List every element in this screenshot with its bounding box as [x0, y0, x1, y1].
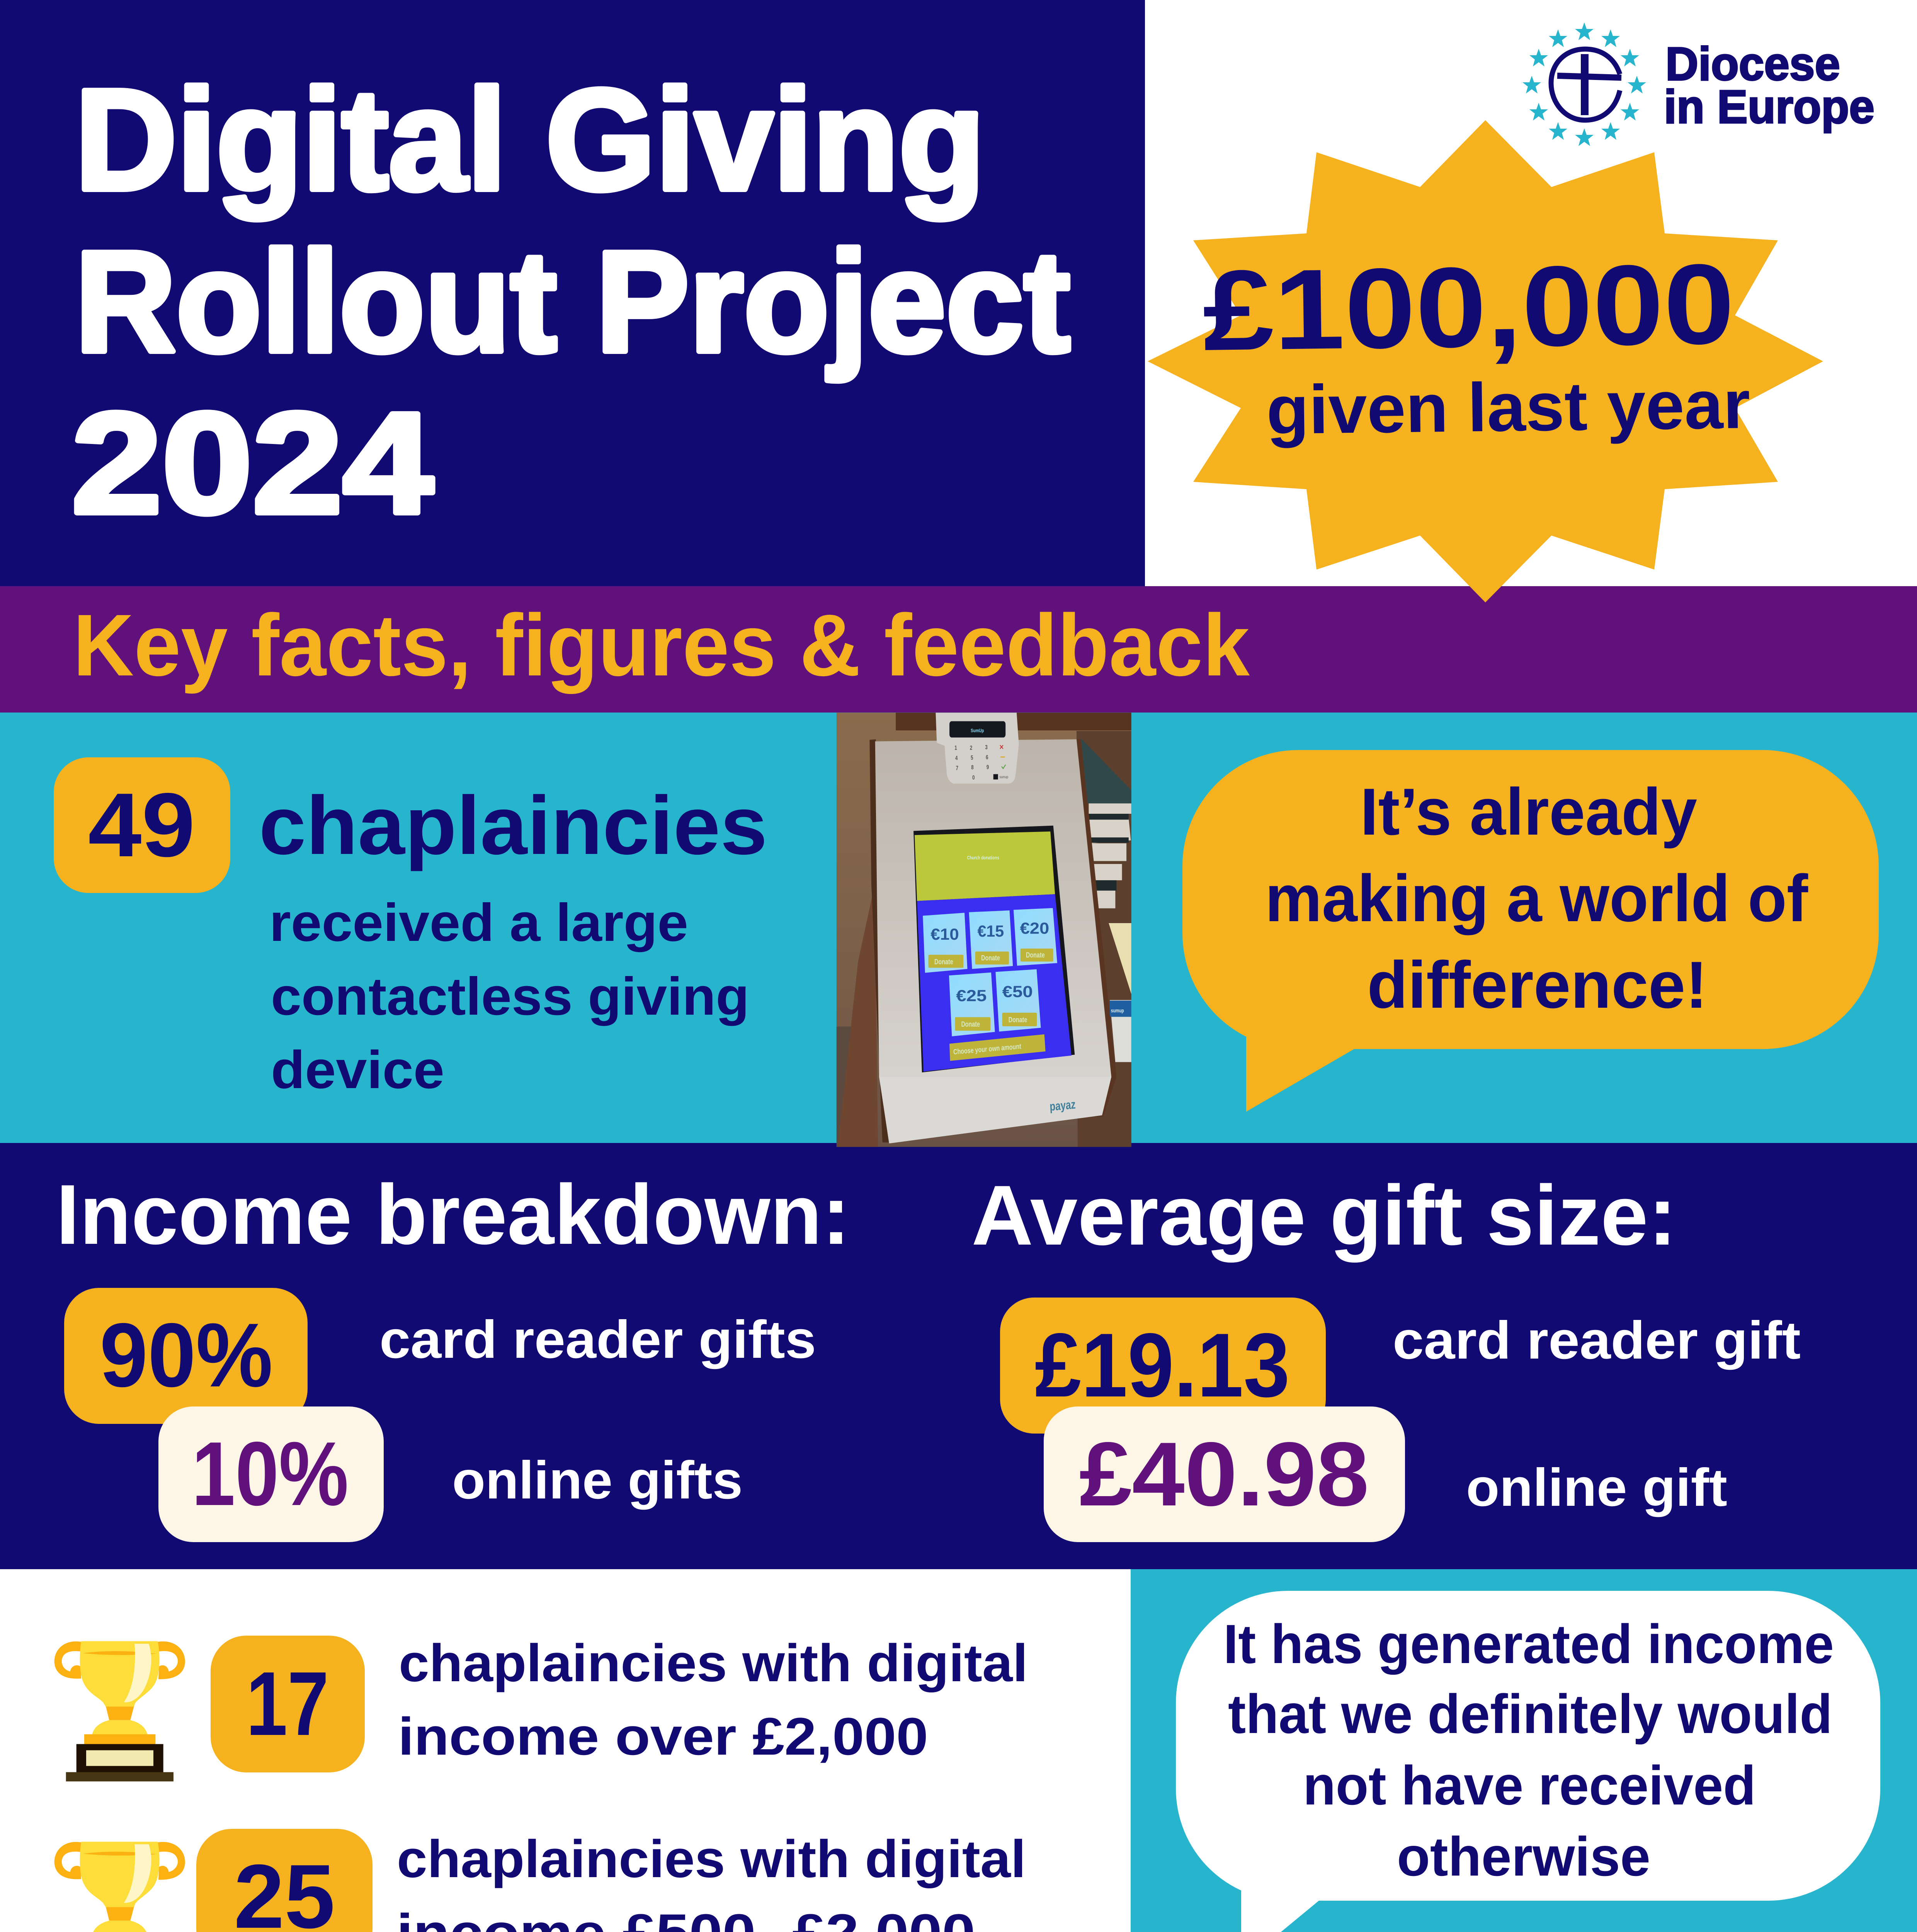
screen: €25 [956, 987, 987, 1005]
speech bubble: world of difference: It’s already [1360, 775, 1697, 849]
text: income 500 to 2,000 [396, 1830, 1026, 1932]
screen: Donate [934, 957, 953, 966]
heading: income breakdown: Income breakdown: [56, 1167, 850, 1262]
screen: Church donations [967, 855, 999, 861]
logo text: in Europe [1664, 80, 1874, 133]
heading: Digital Giving Rollout Project 2024: Rollout Project [75, 221, 1070, 383]
screen: €50 [1002, 983, 1033, 1000]
card reader: 1 [954, 745, 957, 751]
heading: Digital Giving Rollout Project 2024 [71, 59, 1070, 543]
screen: Donate [961, 1020, 980, 1028]
stat: 17 chaplaincies [211, 1636, 365, 1772]
text: income over 2,000 [398, 1634, 1028, 1766]
text: chaplaincies received device: contactless giving [271, 967, 749, 1026]
text: income over 2,000: income over £2,000 [398, 1707, 928, 1766]
stat: 90 percent card reader gifts [64, 1288, 816, 1424]
heading: Digital Giving Rollout Project 2024: Digital Giving [75, 59, 985, 221]
stat: 25 chaplaincies [196, 1829, 373, 1932]
stat: 10 percent online gifts [158, 1406, 743, 1542]
logo: Diocese in Europe [1522, 22, 1874, 146]
speech bubble: world of difference: difference! [1367, 948, 1708, 1022]
speech bubble: world of difference [1182, 750, 1879, 1112]
stat: 90 percent card reader gifts: 90% [100, 1304, 273, 1406]
panel: chaplaincy income tiers [0, 1569, 1131, 1932]
callout: 100,000 starburst: £100,000 [1202, 240, 1735, 374]
card reader: 3 [985, 744, 988, 751]
stat: average card reader gift: card reader gift [1393, 1311, 1801, 1370]
speech bubble: generated income: otherwise [1397, 1826, 1650, 1888]
card reader: SumUp [971, 728, 984, 733]
screen: Choose your own amount [953, 1042, 1022, 1056]
card reader: 0 [972, 774, 975, 781]
stat: 17 chaplaincies: 17 [246, 1653, 329, 1754]
text: chaplaincies received device: chaplaincies [259, 779, 767, 872]
screen: €20 [1020, 919, 1049, 937]
banner: key facts [0, 586, 1917, 713]
speech bubble: generated income [1176, 1591, 1880, 1932]
screen [913, 826, 1075, 1072]
text: chaplaincies received device: device [271, 1040, 444, 1100]
icon: trophy 2 [54, 1842, 185, 1932]
card reader: 7 [956, 765, 958, 771]
photo: contactless giving device [837, 713, 1131, 1147]
panel: feedback quotes [1128, 1569, 1917, 1932]
panel: title [0, 0, 1145, 586]
logo text [1664, 37, 1874, 133]
icon: cross in oval [1551, 49, 1621, 120]
card reader: 2 [970, 745, 972, 751]
stat: average card reader gift [1000, 1298, 1801, 1434]
heading: average gift size: Average gift size: [971, 1168, 1677, 1263]
text: income 500 to 2,000: chaplaincies with digital [397, 1830, 1026, 1889]
screen: Donate [1009, 1015, 1027, 1024]
text: chaplaincies received device [259, 779, 767, 1100]
speech bubble: generated income: that we definitely would [1228, 1684, 1832, 1745]
stat: 90 percent card reader gifts: card reader gifts [379, 1310, 816, 1369]
screen: €15 [977, 922, 1004, 940]
stat badge: 49 [54, 757, 230, 893]
screen: Donate [1026, 951, 1045, 959]
text: chaplaincies received device: received a large [269, 893, 688, 952]
card reader: 6 [986, 754, 988, 761]
stat: average online gift: £40.98 [1079, 1423, 1369, 1525]
icon: ring of stars [1522, 22, 1646, 146]
stat: average online gift: online gift [1466, 1458, 1727, 1517]
stat: average online gift [1044, 1406, 1727, 1542]
card reader: 8 [971, 764, 974, 771]
heading: Digital Giving Rollout Project 2024: 2024 [71, 383, 434, 543]
callout: 100,000 starburst: given last year [1266, 366, 1750, 449]
panel: chaplaincies and device [0, 713, 1917, 1143]
card reader: 9 [987, 764, 989, 770]
text: income over 2,000: chaplaincies with digital [399, 1634, 1028, 1693]
speech bubble: generated income: It has generated income [1223, 1614, 1834, 1675]
card reader: sumup [1000, 775, 1008, 779]
callout: 100,000 starburst [1148, 120, 1823, 602]
photo: contactless giving device: sumup [1111, 1008, 1124, 1014]
stat: 10 percent online gifts: 10% [192, 1423, 349, 1524]
card reader: 4 [955, 755, 958, 761]
screen: €10 [930, 925, 959, 943]
panel: income and gift size [0, 1143, 1917, 1569]
icon: trophy 1 [54, 1641, 185, 1781]
card reader [936, 713, 1019, 784]
card reader: 5 [971, 754, 973, 761]
stat: 10 percent online gifts: online gifts [452, 1451, 743, 1510]
stat: average card reader gift: £19.13 [1035, 1314, 1290, 1416]
device brand: payaz [1050, 1097, 1076, 1114]
speech bubble: generated income: not have received [1303, 1755, 1756, 1816]
speech bubble: world of difference: making a world of [1265, 861, 1808, 935]
stat badge: 49: 49 [88, 774, 195, 876]
screen: Donate [981, 954, 1000, 962]
logo text: Diocese [1665, 37, 1840, 90]
banner: key facts: Key facts, figures & feedback [73, 597, 1250, 694]
